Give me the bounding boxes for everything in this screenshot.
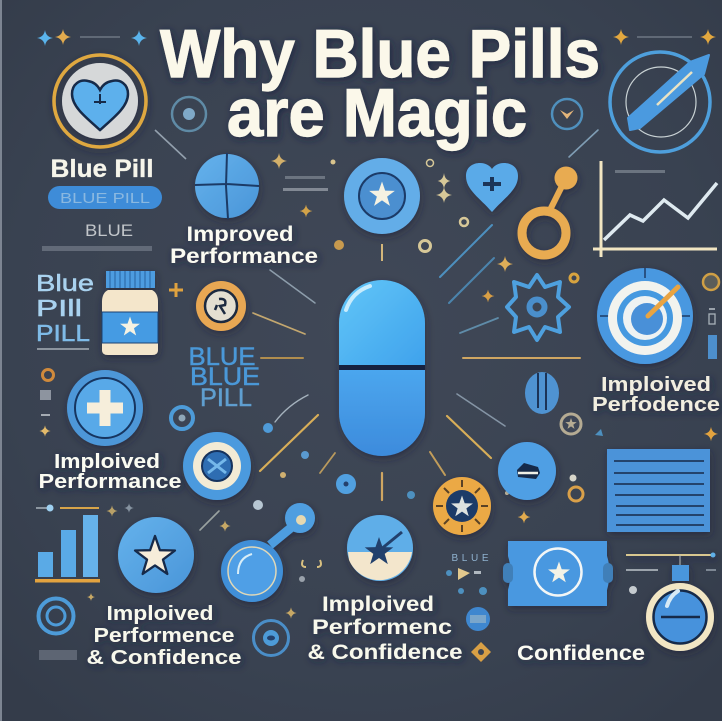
label: Imploived Performence and Confidence: Imploived xyxy=(106,603,214,625)
chart: bar chart xyxy=(35,504,100,582)
label: Imploived Performence and Confidence: Performence xyxy=(94,625,234,647)
label: Improved Performenc and Confidence: Performenc xyxy=(312,616,452,639)
icon: bullseye with dart xyxy=(597,268,693,364)
label: Imploived Performence and Confidence xyxy=(86,603,242,669)
text: Blue PIll PILL stack xyxy=(36,270,94,350)
label: Imploived Performance left: Imploived xyxy=(54,451,160,473)
icon: scored tablet xyxy=(195,153,259,219)
icon: pill bottle xyxy=(102,271,158,355)
panel: lined note xyxy=(607,449,710,532)
label: Improved Performance xyxy=(170,223,318,268)
small decor left column xyxy=(39,370,54,437)
icon: heart with plus xyxy=(466,163,518,212)
rays around pill xyxy=(200,130,598,530)
text: BLUE caption: BLUE xyxy=(85,221,133,240)
text: Blue PIll PILL stack: PIll xyxy=(36,295,82,321)
label: Improved Performance: Improved xyxy=(186,223,294,246)
icon: gear xyxy=(507,275,569,340)
label: Imploived Performance left: Performance xyxy=(38,471,182,493)
label: Imploived Performence and Confidence: & Confidence xyxy=(86,647,242,669)
title xyxy=(160,16,600,151)
icon: small ring left of title xyxy=(172,97,206,131)
label: Improved Performenc and Confidence: & Confidence xyxy=(308,641,462,664)
icon: star disc xyxy=(118,517,194,593)
icon: blue disc xyxy=(498,442,556,500)
icon: gauge xyxy=(626,552,716,651)
icon: gold star badge xyxy=(433,477,491,535)
small decor beside heart xyxy=(381,160,578,302)
text: Blue PIll PILL stack: Blue xyxy=(36,270,94,296)
icon: gold ring with connector xyxy=(522,166,578,255)
icon: gold diamond xyxy=(471,642,491,662)
icon: small ring right of title xyxy=(552,99,582,129)
label: Improved Performenc and Confidence: Imploived xyxy=(322,593,434,616)
icon: gold plus xyxy=(169,283,183,297)
central blue pill xyxy=(339,280,425,456)
label: Improved Performance: Performance xyxy=(170,245,318,268)
sparkles top left xyxy=(37,29,147,46)
sparkles top right xyxy=(613,29,716,45)
label: Imploived Perfodence: Perfodence xyxy=(592,394,720,416)
title: are Magic xyxy=(227,75,527,151)
badge: BLUE PILL: BLUE PILL xyxy=(60,190,150,207)
icon: cream ring xyxy=(561,414,581,434)
text: BLUE BLUE PILL xyxy=(188,343,260,412)
label: Imploived Perfodence xyxy=(592,374,720,416)
ray: top left xyxy=(155,130,186,159)
text: BLUE BLUE PILL: PILL xyxy=(200,384,252,412)
small decor near gauge xyxy=(626,569,716,594)
label: Imploived Perfodence: Imploived xyxy=(601,374,711,396)
small decor top centre xyxy=(271,153,344,250)
badge: BLUE PILL xyxy=(48,186,162,209)
icon: small ring bottom left xyxy=(38,598,74,634)
icon: ticket badge xyxy=(503,541,613,606)
icon: oval split tablet xyxy=(525,372,559,414)
text: Blue PIll PILL stack: PILL xyxy=(36,320,90,346)
icon: orange ring xyxy=(196,281,246,331)
small decor centre bottom xyxy=(299,560,321,582)
text: BLUE BLUE PILL: BLUE xyxy=(188,343,256,371)
icon: star horizon disc xyxy=(347,515,413,581)
small decor centre left xyxy=(87,423,354,619)
small decor right middle xyxy=(407,427,718,523)
icon: heart badge xyxy=(54,55,146,147)
label: Improved Performenc and Confidence xyxy=(308,593,462,664)
label: Confidence: Confidence xyxy=(517,642,645,665)
text: BLUE caption xyxy=(42,221,152,251)
text: BLUE BLUE PILL: BLUE xyxy=(190,363,260,391)
chart: line chart xyxy=(593,161,717,257)
small decor near small BLUE xyxy=(446,568,487,595)
title: Why Blue Pills xyxy=(160,16,600,92)
text: faint caption bottom left xyxy=(39,650,77,660)
icon: small ring near plus xyxy=(171,407,193,429)
icon: target ring xyxy=(183,432,251,500)
small column far right xyxy=(703,274,719,359)
icon: blue small badge xyxy=(466,607,490,631)
label: Imploived Performance left xyxy=(38,451,182,493)
heading: Blue Pill: Blue Pill xyxy=(50,155,154,183)
icon: pencil target xyxy=(610,52,710,152)
icon: star badge xyxy=(344,158,420,234)
icon: plus badge xyxy=(67,370,143,446)
icon: small ring bottom centre xyxy=(254,620,288,656)
text: small BLUE: BLUE xyxy=(452,553,489,564)
icon: magnifier xyxy=(221,503,315,602)
